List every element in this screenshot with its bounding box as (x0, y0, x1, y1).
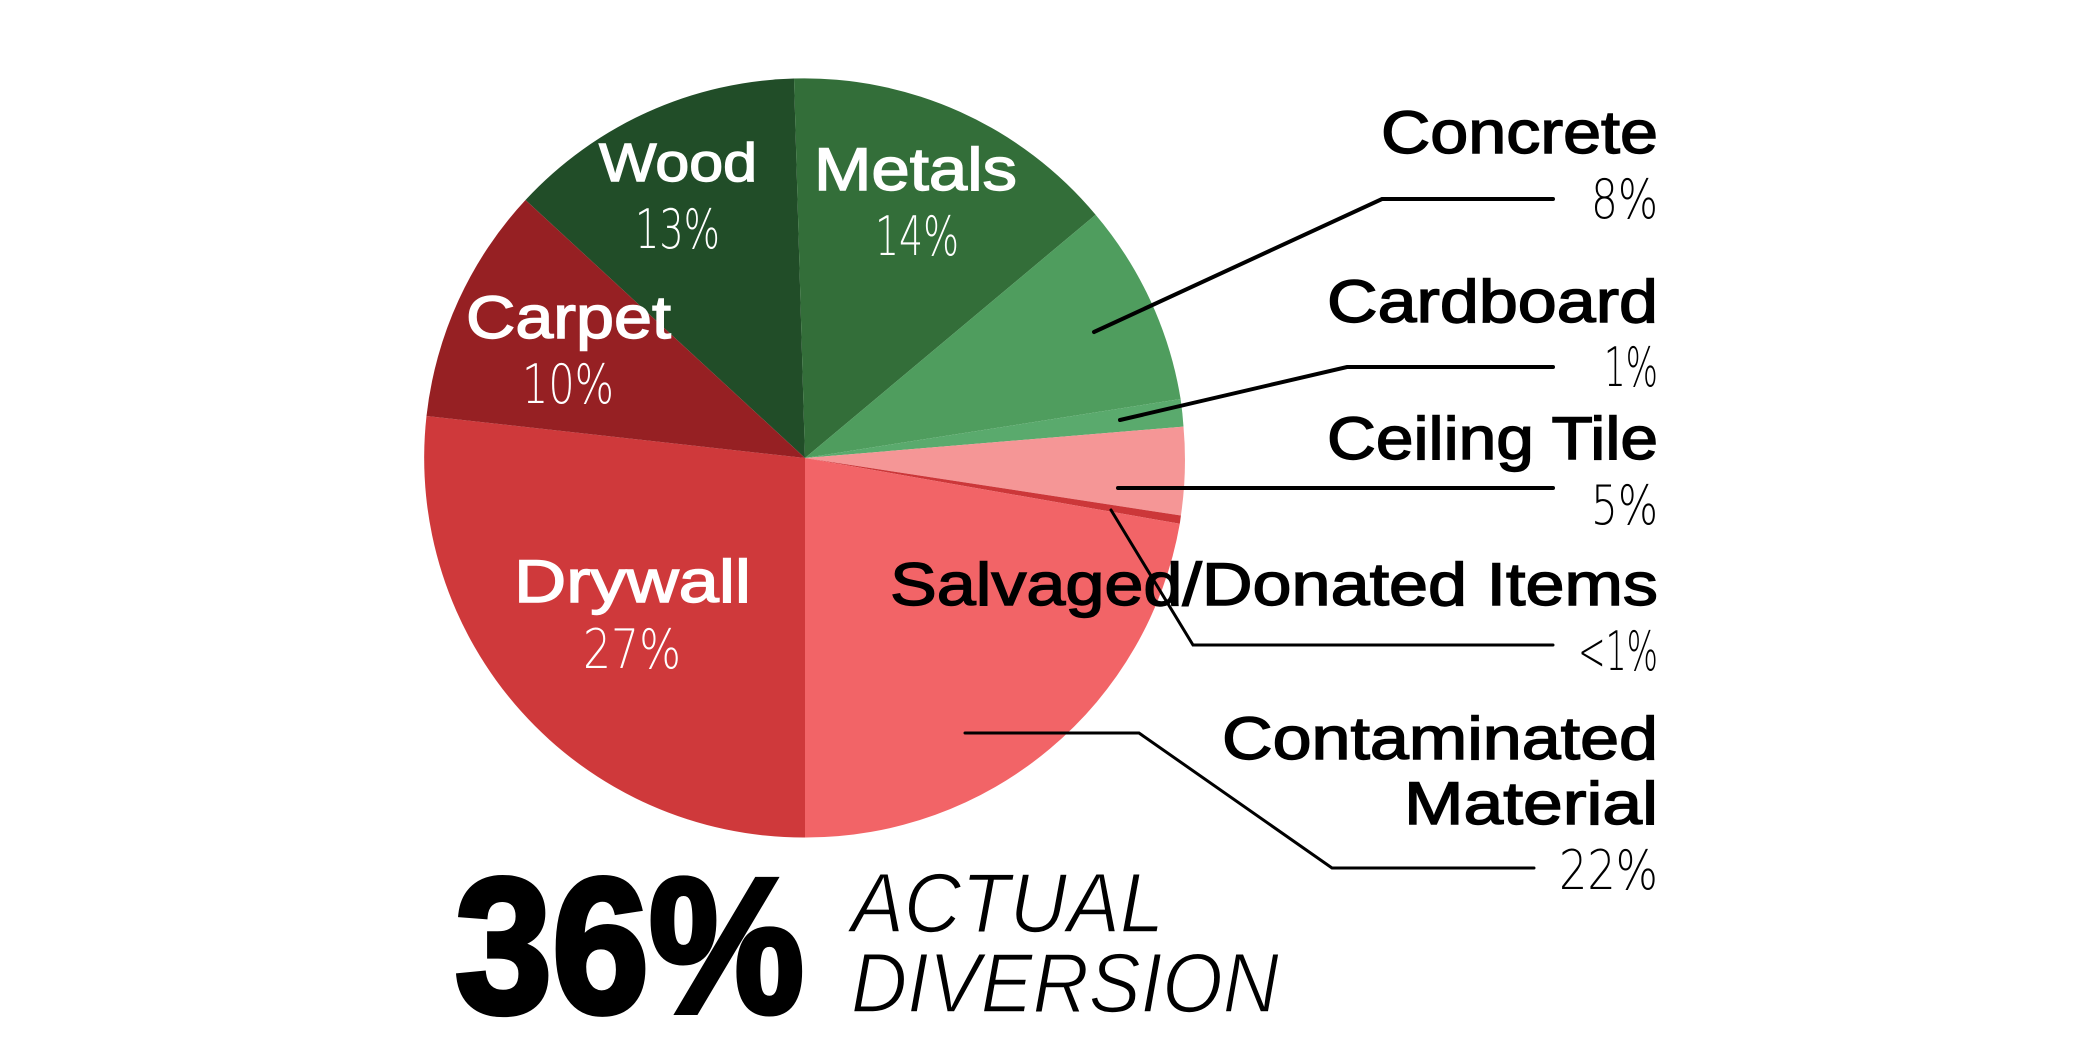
label: metals (814, 136, 1017, 268)
leader line: cardboard (1120, 367, 1553, 420)
label: carpet (466, 284, 671, 416)
leader line: concrete (1094, 199, 1553, 332)
slice: concrete (805, 215, 1181, 458)
slice: contaminated material (805, 458, 1180, 838)
label: carpet: 10% (522, 353, 614, 416)
label: metals: Metals (814, 136, 1017, 203)
label: cardboard: Cardboard (1327, 268, 1658, 335)
leader line: contaminated material (965, 733, 1534, 868)
label: cardboard: 1% (1604, 336, 1658, 399)
label: salvaged/donated items (890, 551, 1658, 683)
label: concrete: 8% (1591, 168, 1658, 231)
slice: cardboard (805, 399, 1184, 458)
slice: wood (526, 78, 805, 458)
headline caption: actual diversion: DIVERSION (851, 936, 1279, 1030)
label: ceiling tile: 5% (1591, 474, 1658, 537)
headline caption: actual diversion (846, 856, 1279, 1030)
label: contaminated material (1222, 705, 1658, 902)
label: wood (599, 133, 757, 261)
label: contaminated material: Contaminated (1222, 705, 1658, 772)
slice: ceiling tile (805, 427, 1185, 516)
label: concrete (1381, 99, 1658, 231)
label: wood: 13% (635, 198, 720, 261)
label: contaminated material: Material (1404, 770, 1658, 837)
slice: metals (794, 78, 1096, 458)
label: contaminated material: 22% (1559, 839, 1658, 902)
label: metals: 14% (875, 205, 959, 268)
label: ceiling tile (1327, 405, 1658, 537)
headline caption: actual diversion: ACTUAL (846, 856, 1164, 950)
label: wood: Wood (599, 133, 757, 193)
label: drywall: Drywall (514, 548, 751, 615)
leader line: salvaged items (1111, 510, 1553, 645)
pie chart (424, 78, 1185, 838)
label: cardboard (1327, 268, 1658, 399)
label: salvaged/donated items: Salvaged/Donated Items (890, 551, 1658, 618)
label: ceiling tile: Ceiling Tile (1327, 405, 1658, 472)
label: salvaged/donated items: <1% (1578, 620, 1658, 683)
leader line: ceiling tile (1118, 486, 1553, 490)
slice: carpet (426, 200, 805, 458)
label: concrete: Concrete (1381, 99, 1658, 166)
slice: salvaged items (805, 458, 1181, 524)
label: drywall: 27% (583, 618, 681, 681)
label: drywall (514, 548, 751, 681)
slice: drywall (424, 416, 805, 838)
label: carpet: Carpet (466, 284, 671, 351)
